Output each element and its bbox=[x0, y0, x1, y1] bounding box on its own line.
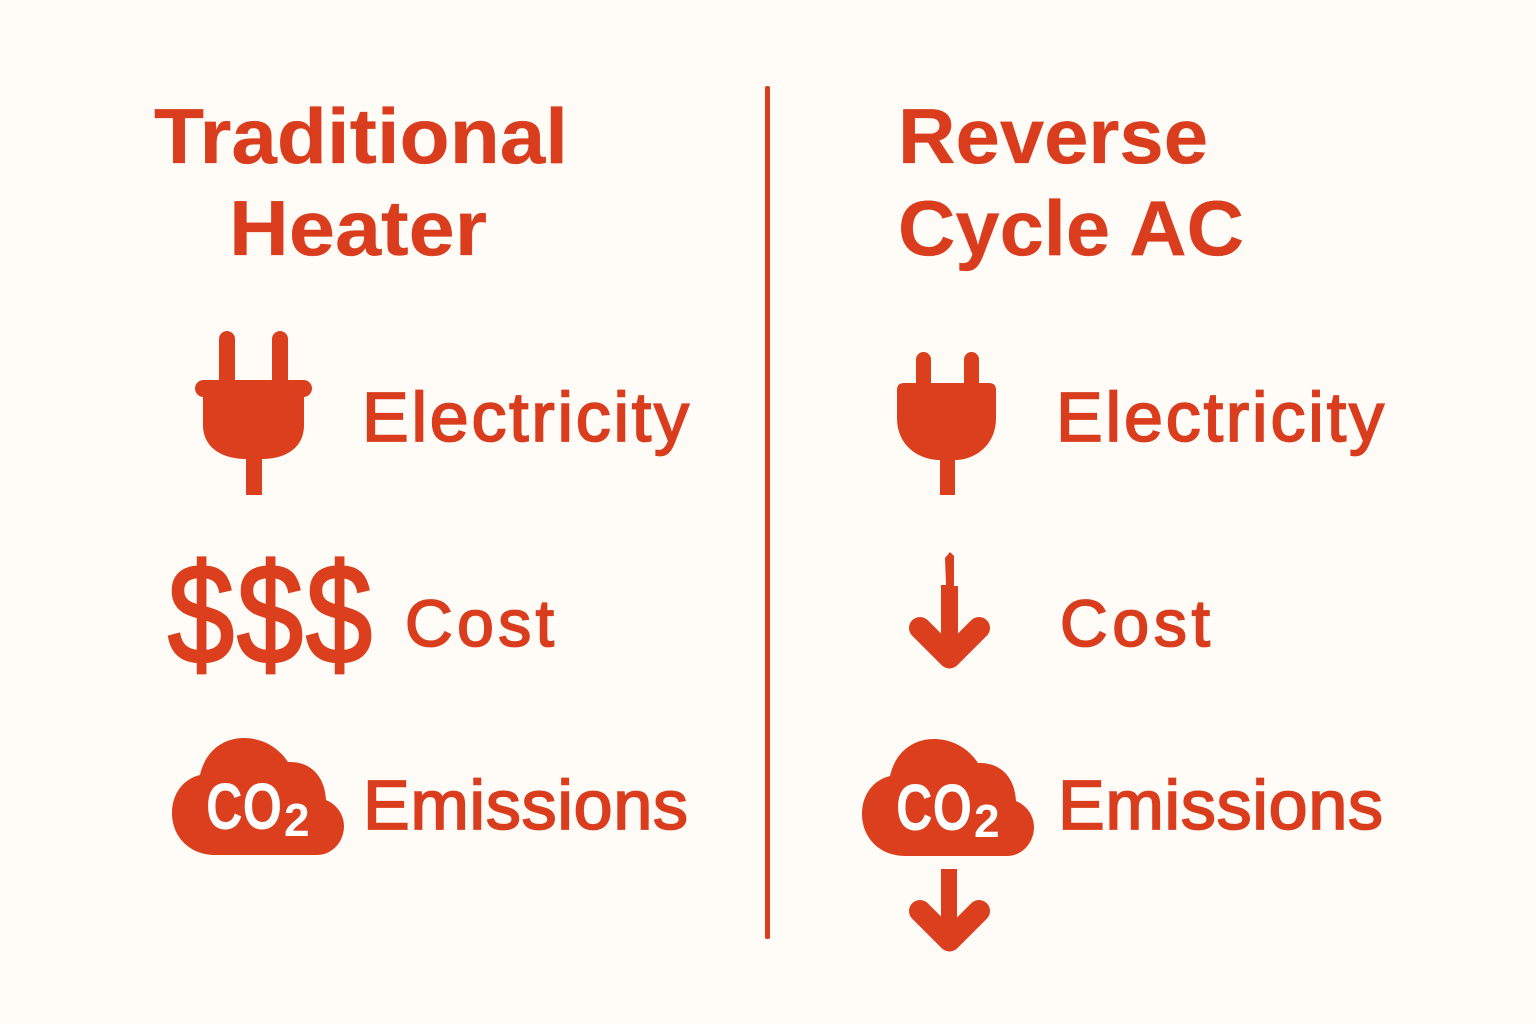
label: Electricity: Electricity bbox=[1056, 378, 1384, 456]
label: Emissions: Emissions bbox=[1058, 766, 1383, 844]
heading: Reverse Cycle AC: Cycle AC bbox=[898, 184, 1244, 272]
label: Electricity: Electricity bbox=[362, 378, 689, 456]
label: Emissions: Emissions bbox=[363, 766, 688, 844]
center divider bbox=[765, 86, 770, 939]
icon: down arrow (lower emissions) bbox=[920, 869, 979, 940]
icon: CO2 cloud: CO bbox=[206, 769, 282, 843]
icon: plug bbox=[195, 331, 312, 495]
icon: three dollar signs bbox=[168, 535, 372, 694]
icon: plug bbox=[897, 352, 996, 495]
icon: CO2 cloud: CO bbox=[896, 770, 972, 844]
panel: reverse cycle AC bbox=[862, 92, 1384, 940]
icon: down arrow (lower cost) bbox=[920, 552, 979, 658]
icon: three dollar signs: $ bbox=[168, 535, 234, 694]
heading: Traditional Heater: Traditional bbox=[154, 92, 568, 180]
heading: Reverse Cycle AC bbox=[898, 92, 1244, 272]
heading: Traditional Heater bbox=[154, 92, 568, 272]
panel: traditional heater bbox=[154, 92, 689, 855]
icon: three dollar signs: $ bbox=[237, 535, 303, 694]
label: Cost: Cost bbox=[405, 586, 554, 660]
label: Cost: Cost bbox=[1060, 586, 1210, 660]
heading: Reverse Cycle AC: Reverse bbox=[898, 92, 1208, 180]
icon: three dollar signs: $ bbox=[306, 535, 372, 694]
heading: Traditional Heater: Heater bbox=[229, 184, 487, 272]
icon: CO2 cloud: 2 bbox=[284, 794, 310, 846]
icon: CO2 cloud: 2 bbox=[974, 795, 1000, 847]
icon: CO2 cloud bbox=[862, 739, 1034, 856]
icon: CO2 cloud bbox=[172, 738, 344, 855]
